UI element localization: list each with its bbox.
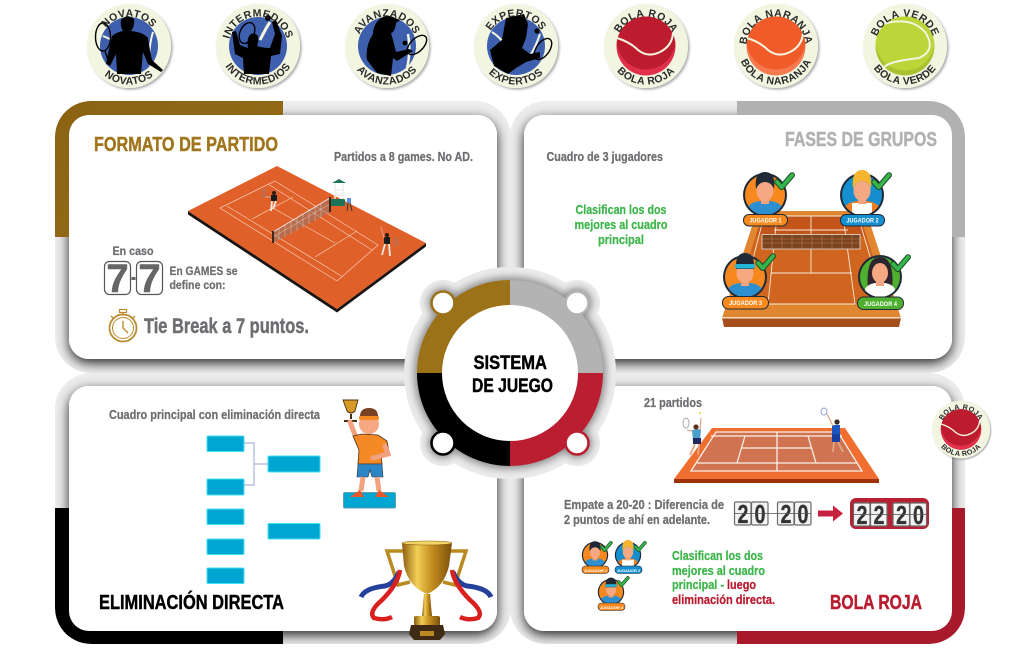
text: clasifican, luego eliminacion directa: principal - luego — [672, 578, 756, 592]
scoreboard 20 20: 2 — [780, 499, 792, 529]
player: far — [262, 190, 277, 211]
badge: bola roja — [604, 4, 691, 91]
avatar: jugador 3 — [722, 253, 773, 309]
text: clasifican, luego eliminacion directa: Clasifican los dos — [672, 549, 763, 563]
text: 21 partidos: 21 partidos — [644, 396, 702, 410]
player: right — [821, 408, 843, 452]
text: clasifican, luego eliminacion directa: eliminación directa. — [672, 593, 775, 607]
text: empate: Empate a 20-20 : Diferencia de — [564, 498, 724, 512]
small avatars: JUGADOR 3 — [600, 605, 624, 610]
badge: intermedios — [216, 4, 303, 91]
text: en caso: En caso — [112, 244, 154, 258]
score 7-7 — [104, 257, 162, 301]
scoreboard 20 20: 0 — [798, 499, 808, 529]
badge: bola roja: BOLA ROJA — [617, 66, 675, 84]
text: en games se define con — [170, 264, 238, 292]
umpire chair — [331, 179, 352, 211]
panel: eliminacion directa — [55, 373, 511, 644]
clay court illustration — [722, 211, 901, 327]
text: en games se define con: En GAMES se — [170, 264, 238, 278]
text: clasifican: Clasifican los dos — [576, 203, 667, 217]
badge: bola roja small — [932, 400, 992, 460]
badge: avanzados — [345, 4, 432, 91]
text: cuadro principal: Cuadro principal con eliminación directa — [109, 408, 321, 422]
badge: expertos — [474, 4, 561, 91]
badge: bola naranja — [734, 4, 821, 91]
scoreboard 20 20: 0 — [754, 499, 766, 529]
ring quadrants — [417, 280, 603, 466]
text: clasifican, luego eliminacion directa: mejores al cuadro — [672, 564, 765, 578]
ring knobs — [432, 292, 588, 454]
hub title: SISTEMA — [474, 353, 547, 374]
badge: bola verde: BOLA VERDE — [870, 9, 940, 36]
badge: bola verde: BOLA VERDE — [874, 64, 936, 84]
scoreboard 20 20 — [734, 499, 811, 529]
scoreboard 22 20: 2 — [874, 500, 884, 530]
illustration: winner with trophy — [343, 400, 396, 508]
badge: avanzados: AVANZADOS — [354, 9, 420, 34]
heading: eliminacion directa: ELIMINACIÓN DIRECTA — [99, 590, 284, 614]
scoreboard 22 20: 2 — [896, 500, 907, 530]
avatar: jugador 4 — [858, 255, 908, 310]
badge: expertos: EXPERTOS — [489, 68, 542, 85]
badge: bola naranja: BOLA NARANJA — [740, 58, 812, 85]
scoreboard 22 20: 0 — [913, 500, 924, 530]
avatar: jugador 1: JUGADOR 1 — [750, 218, 782, 224]
badge: bola roja small: BOLA ROJA — [941, 444, 981, 456]
small avatars: JUGADOR 2 — [617, 568, 641, 573]
badge: bola naranja: BOLA NARANJA — [739, 9, 812, 44]
avatar: jugador 4: JUGADOR 4 — [864, 302, 898, 308]
hub title: DE JUEGO — [472, 376, 553, 397]
panel: bola roja — [510, 373, 965, 644]
scoreboard 20 20: 2 — [738, 499, 748, 529]
heading: bola roja: BOLA ROJA — [830, 592, 922, 614]
badge: novatos: NOVATOS — [104, 70, 152, 84]
avatar: jugador 2: JUGADOR 2 — [846, 218, 879, 224]
player: near — [381, 227, 398, 256]
badge: bola roja small: BOLA ROJA — [938, 404, 982, 420]
score 7-7: 7 — [138, 257, 161, 301]
avatar: jugador 3: JUGADOR 3 — [729, 301, 763, 307]
small avatars — [582, 540, 645, 610]
hub title — [472, 353, 553, 397]
score 7-7: 7 — [106, 257, 129, 301]
badge: avanzados: AVANZADOS — [356, 66, 416, 85]
avatar: jugador 1 — [743, 172, 792, 226]
avatar: jugador 2 — [840, 170, 889, 226]
text: en games se define con: define con: — [170, 278, 226, 292]
badge: bola roja: BOLA ROJA — [614, 9, 677, 32]
bracket diagram — [207, 436, 320, 584]
text: empate — [564, 498, 724, 527]
text: clasifican: mejores al cuadro — [574, 218, 668, 232]
badge: novatos — [87, 4, 174, 91]
center hub: sistema de juego — [404, 267, 616, 479]
player: left — [683, 412, 701, 455]
panel: formato de partido — [55, 101, 511, 373]
text: clasifican, luego eliminacion directa — [672, 549, 775, 607]
text: tie break: Tie Break a 7 puntos. — [144, 315, 309, 338]
text: clasifican: principal — [598, 233, 644, 247]
text: cuadro de 3 jugadores: Cuadro de 3 jugadores — [546, 150, 663, 164]
scoreboard 22 20: 2 — [856, 500, 868, 530]
text: empate: 2 puntos de ahí en adelante. — [564, 513, 710, 527]
icon: stopwatch — [110, 310, 136, 342]
badge: expertos: EXPERTOS — [485, 9, 546, 30]
panel: fases de grupos — [510, 101, 965, 373]
text: clasifican — [574, 203, 668, 247]
court with two players — [674, 408, 879, 483]
clay court with players — [188, 166, 426, 312]
text: partidos a 8 games: Partidos a 8 games. No AD. — [334, 150, 473, 164]
heading: fases de grupos: FASES DE GRUPOS — [785, 129, 937, 151]
badge: bola verde — [863, 4, 950, 91]
badge: novatos: NOVATOS — [101, 9, 156, 28]
illustration: big trophy with ribbons — [361, 541, 491, 640]
heading: formato de partido: FORMATO DE PARTIDO — [94, 134, 278, 156]
arrow — [818, 506, 843, 522]
small avatars: JUGADOR 1 — [584, 568, 608, 573]
badge: intermedios: INTERMEDIOS — [222, 9, 293, 38]
scoreboard 22 20 — [850, 498, 929, 530]
badge: intermedios: INTERMEDIOS — [226, 62, 290, 84]
